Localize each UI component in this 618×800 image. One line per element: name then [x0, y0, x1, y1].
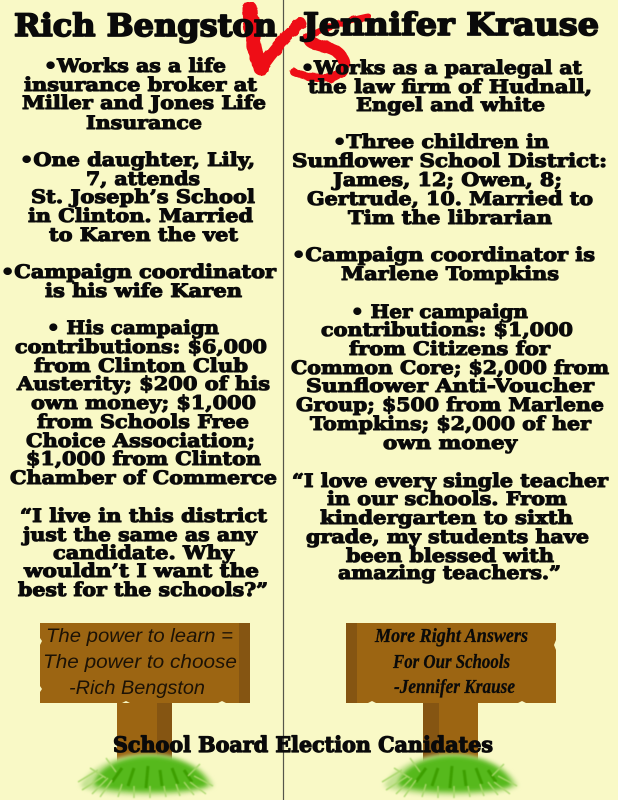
- text: Rich contributions: contributions: $6,000: [15, 336, 267, 358]
- text: Rich occupation: Insurance: [86, 112, 202, 134]
- text: Rich contributions: own money; $1,000: [31, 392, 256, 414]
- text: Rich occupation: Miller and Jones Life: [22, 92, 266, 114]
- text: Jennifer family: •Three children in: [333, 131, 549, 153]
- post: [423, 703, 478, 768]
- text: Jennifer family: Gertrude, 10. Married to: [307, 188, 593, 210]
- text: Jennifer family: Sunflower School District:: [292, 150, 607, 172]
- caption: School Board Election Canidates: School Board Election Canidates: [113, 732, 493, 757]
- text: Jennifer coordinator: [292, 244, 595, 285]
- text: Rich family: St. Joseph’s School: [31, 186, 255, 208]
- text: Rich contributions: • His campaign: [47, 317, 219, 339]
- text: Jennifer quote: grade, my students have: [306, 526, 589, 548]
- text: Jennifer occupation: •Works as a paralegal at: [301, 57, 582, 79]
- text: Rich contributions: Choice Association;: [26, 430, 255, 452]
- grass: left: [78, 754, 214, 798]
- board: [346, 623, 556, 703]
- text: Rich family: in Clinton. Married: [28, 205, 253, 227]
- text: Jennifer coordinator: Marlene Tompkins: [341, 263, 559, 285]
- slogan: right: For Our Schools: [392, 651, 510, 673]
- sign: Rich Bengston: [40, 623, 250, 798]
- text: Rich quote: [18, 505, 268, 601]
- slogan: left: [43, 626, 237, 699]
- text: Jennifer family: James, 12; Owen, 8;: [331, 169, 562, 191]
- text: Jennifer quote: “I love every single teacher: [292, 470, 609, 492]
- text: Rich family: •One daughter, Lily,: [20, 149, 255, 171]
- text: Rich contributions: from Clinton Club: [34, 355, 248, 377]
- text: Jennifer occupation: [301, 57, 592, 116]
- text: Rich occupation: insurance broker at: [24, 74, 257, 96]
- slogan: left: -Rich Bengston: [69, 678, 205, 699]
- text: Jennifer contributions: Common Core; $2,000 from: [291, 357, 609, 379]
- text: Jennifer contributions: Group; $500 from Marlene: [296, 394, 604, 416]
- text: Jennifer contributions: Sunflower Anti-Voucher: [306, 375, 595, 397]
- text: Jennifer quote: been blessed with: [346, 545, 554, 567]
- post: [117, 703, 172, 768]
- slogan: left: The power to learn =: [46, 626, 233, 647]
- text: Rich family: to Karen the vet: [49, 224, 238, 246]
- text: Rich quote: “I live in this district: [20, 505, 267, 527]
- text: Rich contributions: Chamber of Commerce: [10, 467, 277, 489]
- slogan: right: -Jennifer Krause: [394, 676, 515, 698]
- text: Rich coordinator: is his wife Karen: [45, 280, 242, 302]
- text: Rich family: [20, 149, 255, 246]
- text: Jennifer contributions: own money: [383, 432, 518, 454]
- grass: right: [382, 754, 518, 798]
- slogan: left: The power to choose: [43, 652, 237, 673]
- text: Jennifer contributions: contributions: $1,000: [321, 319, 573, 341]
- text: Rich contributions: Austerity; $200 of his: [16, 373, 270, 395]
- text: Jennifer contributions: • Her campaign: [351, 301, 528, 323]
- text: Jennifer family: [292, 131, 607, 229]
- text: Jennifer coordinator: •Campaign coordinator is: [292, 244, 595, 266]
- text: Rich occupation: [22, 55, 266, 134]
- text: Jennifer quote: amazing teachers.”: [338, 562, 561, 584]
- text: Jennifer occupation: Engel and white: [356, 94, 545, 116]
- text: Jennifer contributions: Tompkins; $2,000 of her: [310, 413, 592, 435]
- sign: Jennifer Krause: [346, 623, 556, 798]
- slogan: right: More Right Answers: [374, 625, 528, 647]
- board: [40, 623, 250, 703]
- text: Rich coordinator: •Campaign coordinator: [1, 261, 277, 283]
- text: Rich coordinator: [1, 261, 277, 302]
- text: Rich family: 7, attends: [86, 168, 200, 190]
- text: Jennifer contributions: [291, 301, 609, 454]
- title: Jennifer Krause: Jennifer Krause: [300, 7, 599, 43]
- text: Rich quote: candidate. Why: [53, 542, 235, 564]
- text: Rich contributions: $1,000 from Clinton: [26, 448, 261, 470]
- text: Jennifer family: Tim the librarian: [348, 207, 552, 229]
- text: Rich quote: best for the schools?”: [18, 579, 268, 601]
- text: Rich quote: wouldn’t I want the: [23, 560, 259, 582]
- text: Rich occupation: •Works as a life: [44, 55, 226, 77]
- text: Jennifer quote: [292, 470, 609, 584]
- text: Rich quote: just the same as any: [21, 524, 258, 546]
- text: Jennifer quote: in our schools. From: [327, 488, 567, 510]
- slogan: right: [374, 625, 528, 698]
- text: Jennifer occupation: the law firm of Hudnall,: [308, 76, 592, 98]
- icon: red VS scrawl: [250, 9, 368, 78]
- text: Jennifer contributions: from Citizens for: [349, 338, 551, 360]
- title: Rich Bengston: Rich Bengston: [14, 8, 277, 44]
- text: Jennifer quote: kindergarten to sixth: [320, 507, 573, 529]
- text: Rich contributions: [10, 317, 277, 489]
- text: Rich contributions: from Schools Free: [37, 411, 249, 433]
